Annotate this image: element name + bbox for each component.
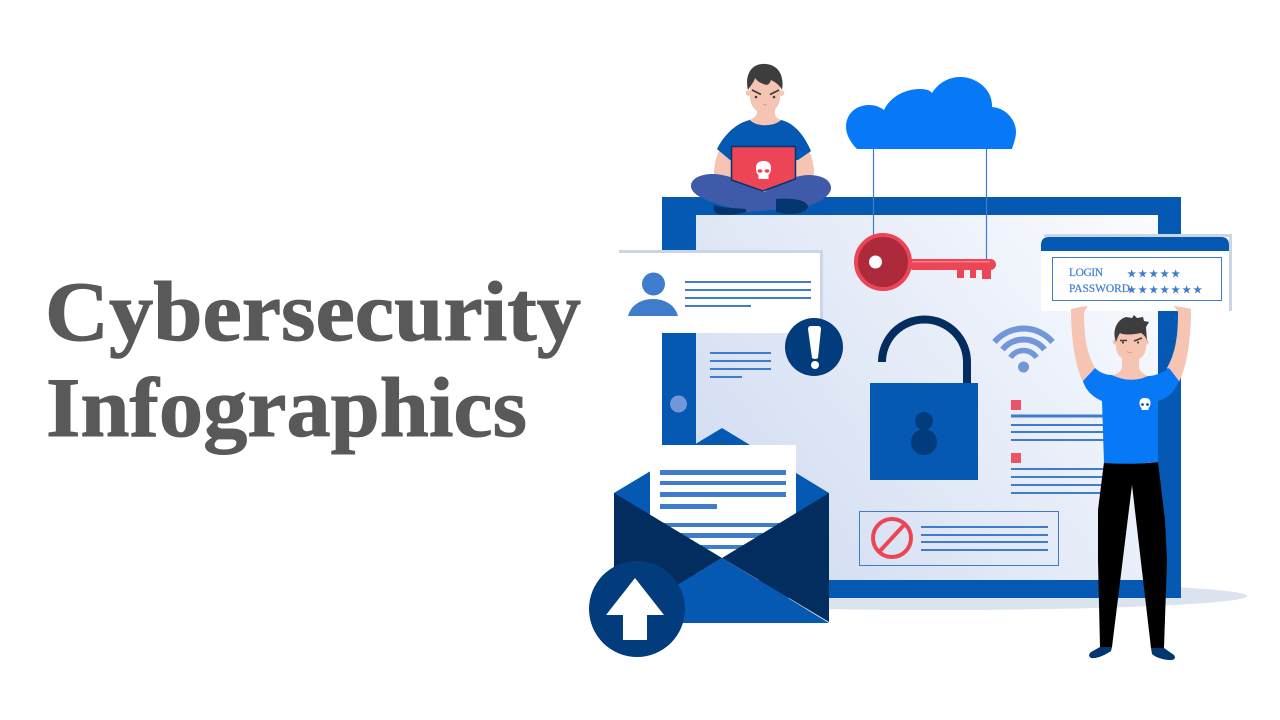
icon: prohibited <box>873 519 911 557</box>
neck <box>749 104 781 127</box>
arms <box>1071 306 1191 382</box>
masked credentials <box>1126 266 1203 296</box>
icon: alert <box>785 318 843 376</box>
icon: red key <box>856 235 996 289</box>
title: Infographics <box>46 361 527 455</box>
neck <box>1111 350 1150 385</box>
screen text lines <box>710 352 771 378</box>
shoes <box>1089 647 1175 660</box>
icon: open envelope <box>614 428 829 623</box>
legs <box>691 174 831 212</box>
shirt <box>1083 368 1179 464</box>
icon: upload arrow <box>589 561 685 657</box>
masked credentials: ★★★★★★★ <box>1126 282 1203 296</box>
cloud <box>846 77 1016 149</box>
profile text lines <box>685 281 811 307</box>
person with laptop <box>691 64 831 215</box>
laptop <box>732 146 796 191</box>
shirt <box>717 120 811 160</box>
pants <box>1098 462 1167 648</box>
arms <box>714 150 814 184</box>
head <box>1113 315 1149 361</box>
masked credentials: ★★★★★ <box>1126 266 1181 280</box>
panel: blocked notice <box>860 512 1058 566</box>
title: Cybersecurity <box>45 265 581 359</box>
person holding login card <box>1071 306 1191 660</box>
monitor frame <box>662 197 1181 598</box>
cloud strings <box>874 149 986 262</box>
checklist <box>1011 400 1111 494</box>
head <box>746 64 784 114</box>
notice text lines <box>921 526 1048 551</box>
ground shadow <box>623 582 1247 610</box>
letter <box>650 445 796 560</box>
login labels: PASSWORD <box>1069 283 1130 295</box>
icon: wifi <box>994 329 1052 372</box>
login labels <box>1069 267 1130 295</box>
icon: shirt skull <box>1140 398 1150 410</box>
icon: user <box>628 272 678 316</box>
icon: open padlock <box>870 320 978 480</box>
feet <box>713 199 808 215</box>
panel: profile card <box>619 250 823 333</box>
panel: login card <box>1041 234 1232 311</box>
title <box>45 265 581 455</box>
login labels: LOGIN <box>1069 267 1104 279</box>
icon: skull <box>756 161 771 179</box>
